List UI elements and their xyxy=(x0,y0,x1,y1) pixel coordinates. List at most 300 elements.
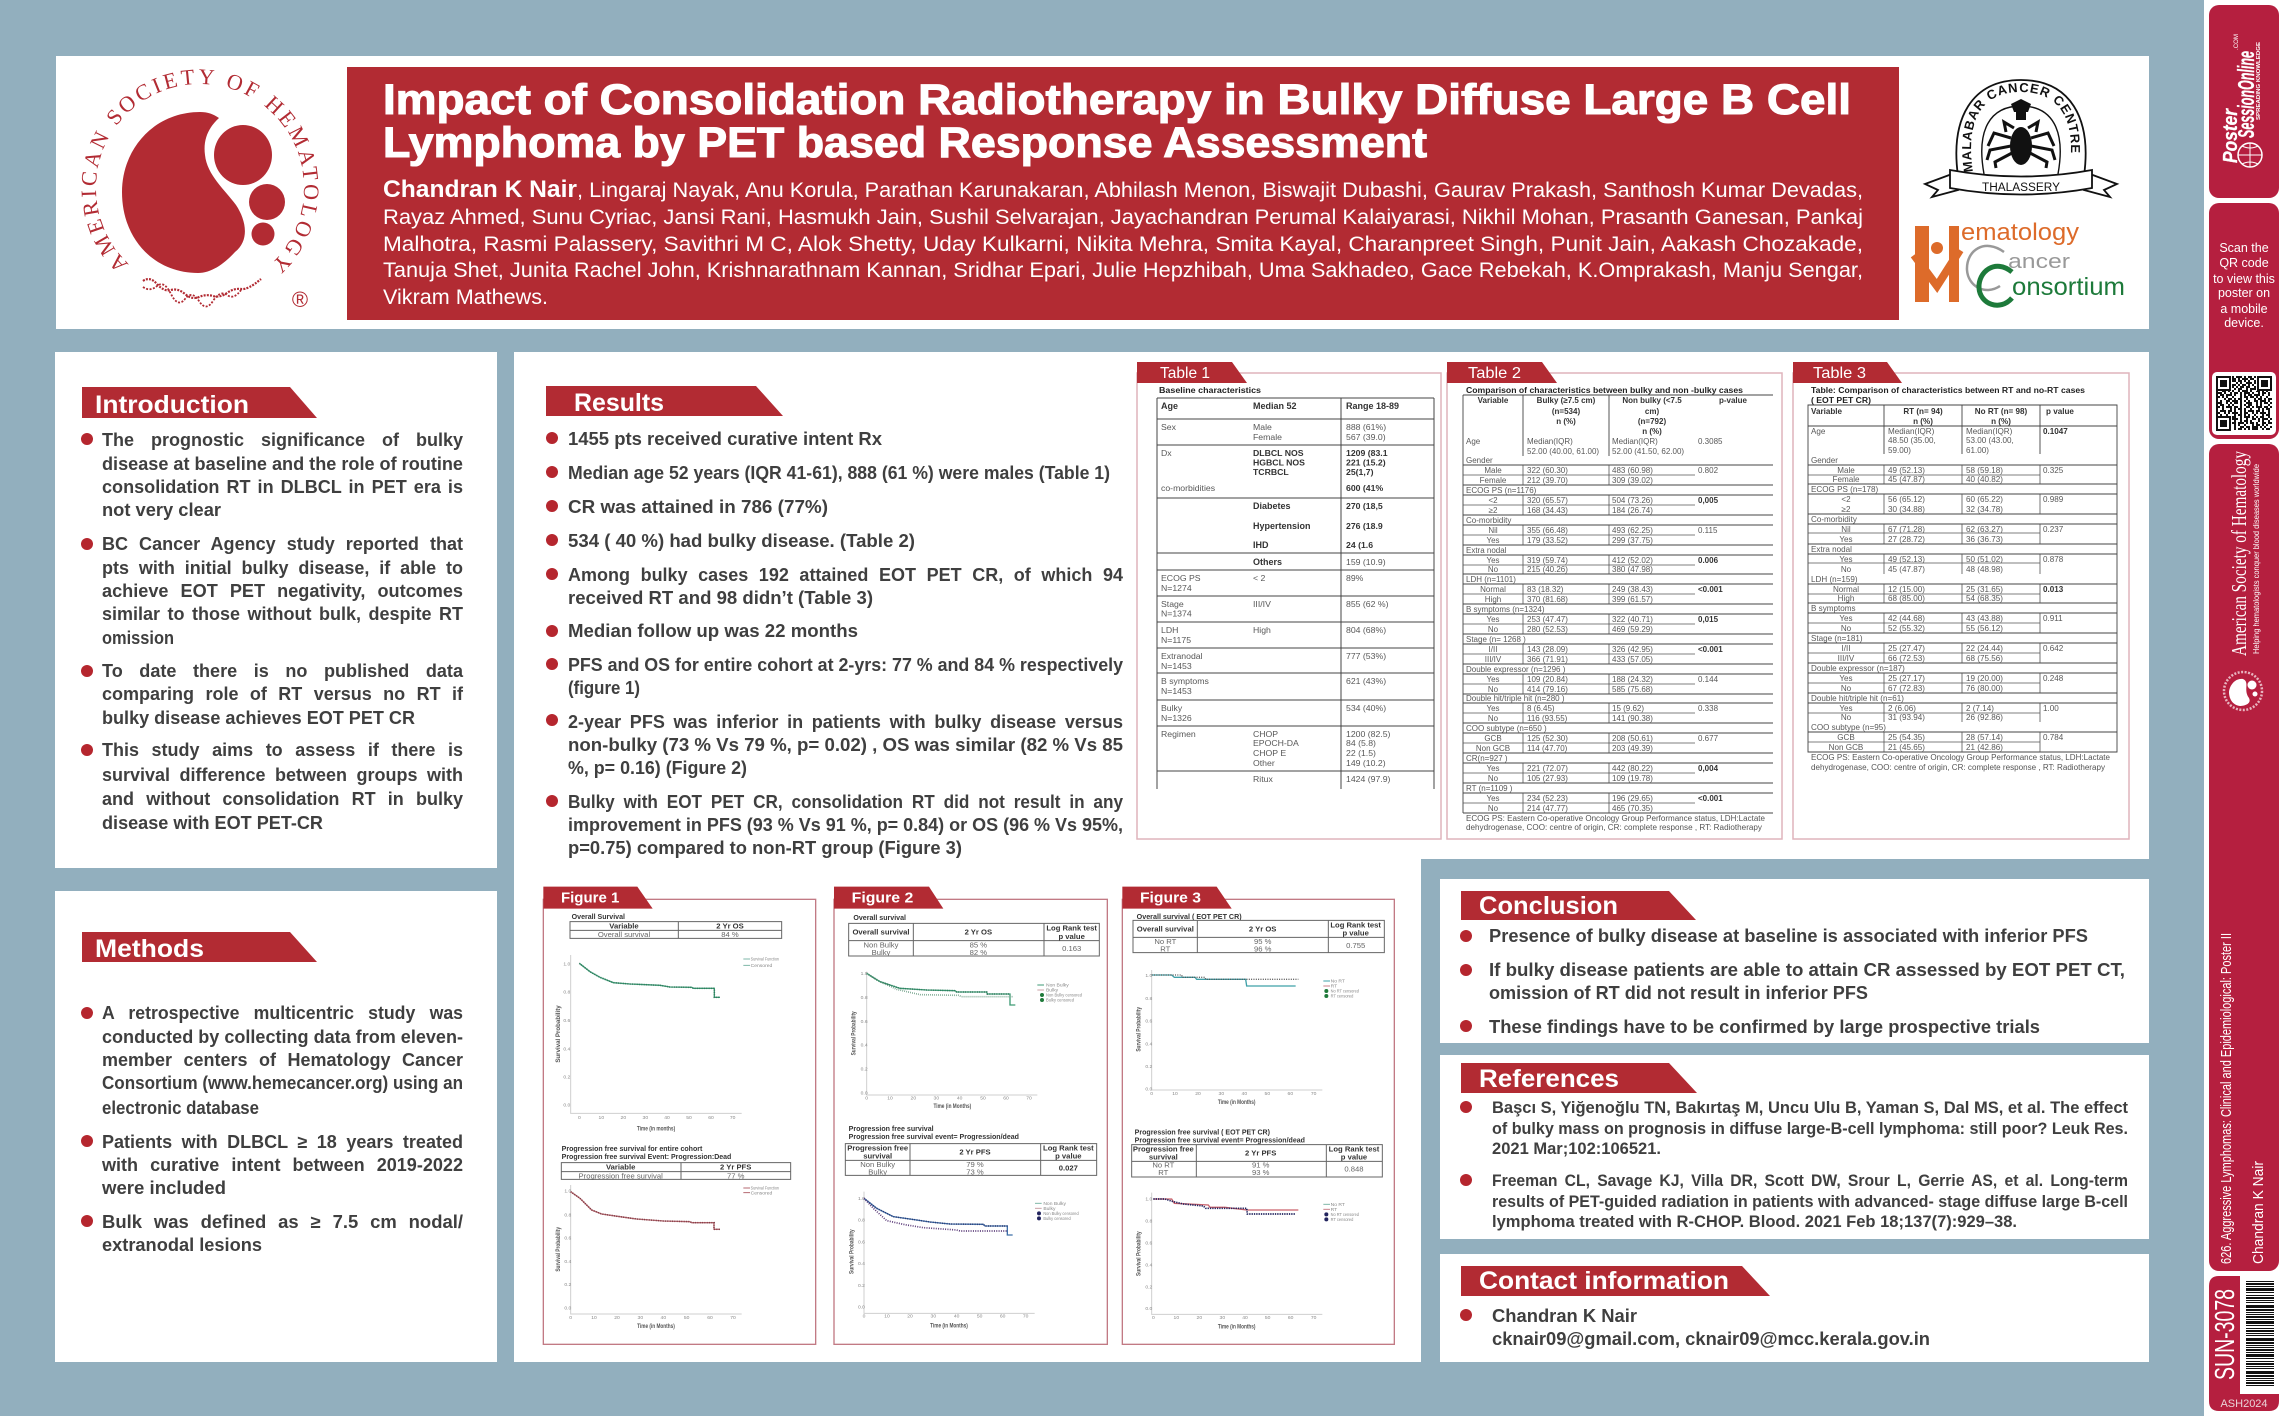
table: bulky vs non-bulky comparison: No xyxy=(1488,565,1499,574)
chart: progression free survival EOT PET CR: 30 xyxy=(1220,1315,1225,1321)
table: baseline characteristics: 221 (15.2) xyxy=(1346,458,1386,468)
sidebar: poster session online: Poster xyxy=(2220,108,2242,163)
chart: overall survival by bulk: 20 xyxy=(911,1095,916,1101)
table: RT vs no-RT comparison: 12 (15.00) xyxy=(1888,585,1925,594)
tab: figure 1 xyxy=(543,887,653,909)
table: baseline characteristics: 1200 (82.5) xyxy=(1346,729,1391,739)
progression free survival table by bulk: p value xyxy=(1055,1151,1082,1160)
chart: overall survival curve: 40 xyxy=(664,1115,670,1121)
table: bulky vs non-bulky comparison: 412 (52.02) xyxy=(1612,556,1653,565)
reference list: lymphoma treated with R-CHOP. Blood. 2021 Feb 18;137(7):929–38. xyxy=(1492,1213,2017,1231)
overall survival table EOT PET CR: No RT xyxy=(1154,937,1177,946)
table: bulky vs non-bulky comparison: cm) xyxy=(1645,407,1659,416)
table: baseline characteristics: High xyxy=(1253,625,1271,635)
table: baseline characteristics: TCRBCL xyxy=(1253,467,1289,477)
table: bulky vs non-bulky comparison: 0.338 xyxy=(1698,704,1719,713)
table: RT vs no-RT comparison: High xyxy=(1838,594,1854,603)
chart: progression free survival by bulk: 0.4 xyxy=(858,1261,865,1267)
chart: progression free survival by bulk: 0.2 xyxy=(858,1283,865,1289)
progression free survival table EOT PET CR: No RT xyxy=(1152,1161,1175,1170)
table: baseline characteristics: 270 (18,5 xyxy=(1346,501,1383,511)
table title: baseline characteristics: Baseline characteristics xyxy=(1159,386,1262,395)
table: RT vs no-RT comparison: 67 (72.83) xyxy=(1888,684,1925,693)
panel: table 1 xyxy=(1137,362,1441,839)
table: bulky vs non-bulky comparison: 0.677 xyxy=(1698,734,1719,743)
reference list: of bulky mass on prognosis in diffuse large-B-cell lymphoma: still poor? Leuk Res. xyxy=(1492,1120,2128,1138)
temple crest xyxy=(2011,99,2031,120)
overall survival table EOT PET CR: 2 Yr OS xyxy=(1249,925,1276,934)
progression free survival table by bulk: 2 Yr PFS xyxy=(959,1147,991,1156)
table: baseline characteristics: 276 (18.9 xyxy=(1346,521,1383,531)
chart: overall survival EOT PET CR: 70 xyxy=(1311,1091,1317,1097)
table: RT vs no-RT comparison: 0.989 xyxy=(2043,495,2064,504)
table: bulky vs non-bulky comparison: Female xyxy=(1480,476,1507,485)
icon: barcode xyxy=(2246,1281,2274,1387)
table: bulky vs non-bulky comparison: 83 (18.32) xyxy=(1527,585,1564,594)
table: RT vs no-RT comparison: 19 (20.00) xyxy=(1966,674,2003,683)
table: baseline characteristics: Median 52 xyxy=(1253,401,1297,411)
chart: progression free survival EOT PET CR: 40 xyxy=(1242,1315,1248,1321)
logo: Hematology Cancer Consortium: onsortium xyxy=(2012,273,2125,301)
table: bulky vs non-bulky comparison: 105 (27.93) xyxy=(1527,774,1568,783)
sidebar: poster number and barcode xyxy=(2209,1276,2279,1411)
chart: progression free survival by bulk: 30 xyxy=(931,1314,936,1320)
table: RT vs no-RT comparison: 25 (27.17) xyxy=(1888,674,1925,683)
chart: overall survival EOT PET CR: Time (in Months) xyxy=(1218,1099,1255,1106)
overall survival table by bulk: Overall survival xyxy=(853,913,906,922)
table: RT vs no-RT comparison: 55 (56.12) xyxy=(1966,624,2003,633)
panel: methods xyxy=(55,891,497,1362)
chart: progression free survival curve: Survival Function xyxy=(751,1186,779,1192)
table: bulky vs non-bulky comparison: Yes xyxy=(1486,536,1500,545)
table: bulky vs non-bulky comparison: Double expressor (n=1296 ) xyxy=(1466,665,1566,674)
table: bulky vs non-bulky comparison: 114 (47.70) xyxy=(1527,744,1568,753)
logo: Malabar Cancer Centre: MALABAR CANCER CENTRE xyxy=(1962,83,2080,172)
table: baseline characteristics: Hypertension xyxy=(1253,521,1311,531)
table: baseline characteristics: Other xyxy=(1253,758,1275,768)
header panel xyxy=(56,56,2149,329)
table: bulky vs non-bulky comparison: RT (n=1109 ) xyxy=(1466,784,1513,793)
table: baseline characteristics: 84 (5.8) xyxy=(1346,738,1376,748)
chart: progression free survival curve: 0.2 xyxy=(564,1282,571,1288)
chart: overall survival by bulk: Survival Probability xyxy=(851,1011,858,1055)
bullets: results: CR was attained in 786 (77%) xyxy=(568,497,828,517)
table: bulky vs non-bulky comparison: 370 (81.68) xyxy=(1527,595,1568,604)
bullets: conclusion: Presence of bulky disease at baseline is associated with inferior PFS xyxy=(1489,926,2088,946)
chart: progression free survival by bulk: 10 xyxy=(884,1314,890,1320)
table: RT vs no-RT comparison: 45 (47.87) xyxy=(1888,475,1925,484)
table: RT vs no-RT comparison: 54 (68.35) xyxy=(1966,594,2003,603)
bullets: methods: Patients with DLBCL ≥ 18 years treated xyxy=(102,1132,463,1152)
table: bulky vs non-bulky comparison: Median(IQR) xyxy=(1612,437,1658,446)
table: RT vs no-RT comparison: 40 (40.82) xyxy=(1966,475,2003,484)
chart: overall survival EOT PET CR: No RT censored xyxy=(1331,989,1359,995)
contact details: Chandran K Nair xyxy=(1492,1306,1637,1326)
bullets: results: Bulky with EOT PET CR, consolidation RT did not result in any xyxy=(568,792,1123,812)
table: bulky vs non-bulky comparison: 52.00 (40.00, 61.00) xyxy=(1527,447,1599,456)
table: RT vs no-RT comparison: Non GCB xyxy=(1829,743,1863,752)
bullets: methods: electronic database xyxy=(102,1098,259,1118)
chart: overall survival EOT PET CR: RT xyxy=(1331,984,1337,990)
table: RT vs no-RT comparison: 67 (71.28) xyxy=(1888,525,1925,534)
table: bulky vs non-bulky comparison: 188 (24.32) xyxy=(1612,675,1653,684)
chart: progression free survival EOT PET CR: 0.0 xyxy=(1145,1306,1152,1312)
chart: progression free survival EOT PET CR: 70 xyxy=(1311,1315,1317,1321)
table: bulky vs non-bulky comparison: 0.115 xyxy=(1698,526,1718,535)
heading: methods: Methods xyxy=(95,935,204,963)
table: baseline characteristics: DLBCL NOS xyxy=(1253,448,1304,458)
progression free survival table EOT PET CR: Progression free xyxy=(1133,1144,1194,1153)
table: baseline characteristics: 1424 (97.9) xyxy=(1346,774,1391,784)
chart: progression free survival by bulk: Bulky censored xyxy=(1043,1216,1071,1222)
tab: table 2 xyxy=(1447,362,1557,383)
table: RT vs no-RT comparison: 36 (36.73) xyxy=(1966,535,2003,544)
table: RT vs no-RT comparison: 42 (44.68) xyxy=(1888,614,1925,623)
panel: references xyxy=(1440,1055,2149,1239)
table: bulky vs non-bulky comparison: Variable xyxy=(1478,396,1509,405)
table: bulky vs non-bulky comparison: n (%) xyxy=(1556,417,1576,426)
overall survival table by bulk: Log Rank test xyxy=(1046,924,1097,933)
table: bulky vs non-bulky comparison: Median(IQR) xyxy=(1527,437,1573,446)
table: bulky vs non-bulky comparison: 212 (39.70) xyxy=(1527,476,1568,485)
chart: progression free survival EOT PET CR: Time (in Months) xyxy=(1218,1323,1255,1330)
table: RT vs no-RT comparison: 56 (65.12) xyxy=(1888,495,1925,504)
overall survival table: Overall Survival xyxy=(572,912,625,921)
chart: progression free survival by bulk: 1.0 xyxy=(858,1196,865,1202)
panel: results xyxy=(514,352,2149,1362)
table: baseline characteristics: Others xyxy=(1253,557,1282,567)
chart: progression free survival by bulk xyxy=(848,1192,1079,1329)
chart: overall survival curve: 30 xyxy=(643,1115,648,1121)
table: bulky vs non-bulky comparison: 320 (65.57) xyxy=(1527,496,1568,505)
heading: introduction xyxy=(82,387,317,419)
chart: overall survival EOT PET CR: 0.2 xyxy=(1145,1064,1152,1070)
table: RT vs no-RT comparison: GCB xyxy=(1837,733,1855,742)
table: bulky vs non-bulky comparison: (n=792) xyxy=(1638,417,1666,426)
table: bulky vs non-bulky comparison: 465 (70.35) xyxy=(1612,804,1653,813)
chart: overall survival EOT PET CR: 1.0 xyxy=(1145,973,1152,979)
table: RT vs no-RT comparison: No xyxy=(1841,565,1852,574)
bullets: conclusion: These findings have to be confirmed by large prospective trials xyxy=(1489,1017,2040,1037)
progression free survival table: 2 Yr PFS xyxy=(720,1163,751,1172)
chart: overall survival curve: 1.0 xyxy=(563,962,570,968)
table: bulky vs non-bulky comparison: 0.144 xyxy=(1698,675,1719,684)
progression free survival table by bulk: 0.027 xyxy=(1059,1164,1078,1173)
table: RT vs no-RT comparison: COO subtype (n=95) xyxy=(1811,723,1886,732)
banner: Thalassery: THALASSERY xyxy=(1982,182,2060,194)
table: RT vs no-RT comparison: Normal xyxy=(1833,585,1859,594)
chart: overall survival by bulk: 10 xyxy=(887,1095,893,1101)
bullets: results: PFS and OS for entire cohort at 2-yrs: 77 % and 84 % respectively xyxy=(568,655,1123,675)
table: RT vs no-RT comparison: No xyxy=(1841,684,1852,693)
chart: overall survival curve: 20 xyxy=(621,1115,626,1121)
table: RT vs no-RT comparison: 61.00) xyxy=(1966,446,1989,455)
table: baseline characteristics: 159 (10.9) xyxy=(1346,557,1386,567)
banner: Thalassery xyxy=(1925,170,2117,197)
bullets: results: 1455 pts received curative intent Rx xyxy=(568,429,882,449)
table: RT vs no-RT comparison: 0.784 xyxy=(2043,733,2064,742)
overall survival table EOT PET CR: 95 % xyxy=(1254,937,1272,946)
bullets: methods: extranodal lesions xyxy=(102,1235,262,1255)
table: baseline characteristics: 777 (53%) xyxy=(1346,651,1386,661)
progression free survival table EOT PET CR: Progression free survival ( EOT PET CR) xyxy=(1135,1128,1270,1137)
table: RT vs no-RT comparison: Stage (n=181) xyxy=(1811,634,1863,643)
overall survival table by bulk: 82 % xyxy=(970,948,987,957)
table: bulky vs non-bulky comparison: 214 (47.77) xyxy=(1527,804,1568,813)
table: bulky vs non-bulky comparison: LDH (n=1101) xyxy=(1466,575,1516,584)
table: bulky vs non-bulky comparison: 215 (40.26) xyxy=(1527,565,1568,574)
sidebar: poster number and barcode: SUN-3078 xyxy=(2209,1289,2240,1380)
authors xyxy=(383,176,1863,309)
table: baseline characteristics: N=1175 xyxy=(1161,635,1191,645)
chart: overall survival EOT PET CR: Survival Probability xyxy=(1136,1007,1143,1052)
table: baseline characteristics: Age xyxy=(1161,401,1178,411)
chart: progression free survival curve: 20 xyxy=(614,1315,620,1321)
table: bulky vs non-bulky comparison: Bulky (≥7.5 cm) xyxy=(1537,396,1596,405)
bullets: introduction: not very clear xyxy=(102,500,221,520)
table: bulky vs non-bulky comparison: Non bulky (<7.5 xyxy=(1622,396,1682,405)
table: bulky vs non-bulky comparison: <0.001 xyxy=(1698,794,1723,803)
table: baseline characteristics: N=1453 xyxy=(1161,686,1192,696)
table: bulky vs non-bulky comparison: Nil xyxy=(1488,526,1498,535)
chart: overall survival EOT PET CR: 60 xyxy=(1288,1091,1293,1097)
bullets: introduction: achieve EOT PET negativity, outcomes xyxy=(102,581,463,601)
overall survival table: Variable xyxy=(609,921,639,930)
progression free survival table: Progression free survival for entire cohort xyxy=(562,1144,703,1153)
chart: progression free survival curve: 60 xyxy=(707,1315,713,1321)
chart: progression free survival EOT PET CR: No RT xyxy=(1331,1202,1345,1208)
table: bulky vs non-bulky comparison: Yes xyxy=(1486,615,1500,624)
progression free survival table by bulk: Log Rank test xyxy=(1043,1143,1094,1152)
panel: introduction xyxy=(55,352,497,868)
table: RT vs no-RT comparison: No xyxy=(1841,624,1852,633)
heading: results: Results xyxy=(574,389,664,417)
progression free survival table: Variable xyxy=(606,1163,635,1172)
table: RT vs no-RT comparison: 66 (72.53) xyxy=(1888,654,1925,663)
table: RT vs no-RT comparison: 25 (31.65) xyxy=(1966,585,2003,594)
bullets: introduction: This study aims to assess if there is xyxy=(102,740,463,760)
table: RT vs no-RT comparison: 0.911 xyxy=(2043,614,2063,623)
progression free survival table by bulk: 73 % xyxy=(966,1167,984,1176)
chart: overall survival curve: 60 xyxy=(708,1115,714,1121)
progression free survival table EOT PET CR: 91 % xyxy=(1252,1161,1270,1170)
table: RT vs no-RT comparison: Variable xyxy=(1811,407,1843,416)
table: baseline characteristics: Stage xyxy=(1161,599,1184,609)
chart: progression free survival by bulk: 50 xyxy=(977,1314,983,1320)
chart: progression free survival curve: 0.4 xyxy=(564,1259,571,1265)
table: RT vs no-RT comparison: 0.1047 xyxy=(2043,427,2068,436)
table: bulky vs non-bulky comparison: 168 (34.43) xyxy=(1527,506,1568,515)
table: bulky vs non-bulky comparison: <0.001 xyxy=(1698,645,1723,654)
bullets: introduction: disease with EOT PET-CR xyxy=(102,813,323,833)
overall survival table by bulk: p value xyxy=(1058,932,1085,941)
table 2 footnote xyxy=(1466,814,1766,832)
chart: progression free survival by bulk: 0.8 xyxy=(858,1218,865,1224)
progression free survival table: 77 % xyxy=(727,1171,745,1180)
table: baseline characteristics: 25(1,7) xyxy=(1346,467,1374,477)
panel: table 2 xyxy=(1447,362,1782,839)
table: bulky vs non-bulky comparison: 504 (73.26) xyxy=(1612,496,1653,505)
table: bulky vs non-bulky comparison: 15 (9.62) xyxy=(1612,704,1644,713)
table: RT vs no-RT comparison: <2 xyxy=(1841,495,1851,504)
progression free survival table EOT PET CR: 93 % xyxy=(1252,1168,1270,1177)
bullets: methods: were included xyxy=(101,1178,226,1198)
tab: figure 1: Figure 1 xyxy=(561,889,619,906)
chart: progression free survival EOT PET CR: 10 xyxy=(1174,1315,1179,1321)
table: bulky vs non-bulky comparison: COO subtype (n=650 ) xyxy=(1466,724,1547,733)
table: bulky vs non-bulky comparison: Double hit/triple hit (n=280 ) xyxy=(1466,694,1565,703)
table: bulky vs non-bulky comparison: p-value xyxy=(1719,396,1748,405)
overall survival table by bulk: 0.163 xyxy=(1062,944,1081,953)
reference list xyxy=(1460,1099,2128,1231)
chart: overall survival EOT PET CR: 50 xyxy=(1265,1091,1270,1097)
overall survival table: 2 Yr OS xyxy=(716,921,744,930)
table: RT vs no-RT comparison: Age xyxy=(1811,427,1826,436)
table: bulky vs non-bulky comparison: 366 (71.91) xyxy=(1527,655,1568,664)
table: baseline characteristics: co-morbidities xyxy=(1161,483,1216,493)
table: bulky vs non-bulky comparison: 179 (33.52) xyxy=(1527,536,1568,545)
overall survival table: Overall survival xyxy=(598,930,650,939)
progression free survival table EOT PET CR xyxy=(1132,1128,1382,1177)
poster title: Lymphoma by PET based Response Assessment xyxy=(383,119,1427,167)
progression free survival table xyxy=(561,1144,791,1180)
table: RT vs no-RT comparison: LDH (n=159) xyxy=(1811,575,1858,584)
sidebar: session details xyxy=(2209,444,2279,1271)
table: bulky vs non-bulky comparison: Yes xyxy=(1486,794,1500,803)
chart: progression free survival by bulk: Non Bulky censored xyxy=(1043,1211,1079,1217)
progression free survival table EOT PET CR: survival xyxy=(1149,1152,1178,1161)
poster title xyxy=(383,76,1851,167)
table: RT vs no-RT comparison: Yes xyxy=(1839,614,1853,623)
table: baseline characteristics: N=1326 xyxy=(1161,713,1192,723)
chart: progression free survival curve: 0.6 xyxy=(564,1236,571,1242)
bullets: introduction xyxy=(81,430,464,833)
progression free survival table by bulk: survival xyxy=(863,1151,892,1160)
progression free survival table: Progression free survival Event: Progression:Dead xyxy=(562,1152,732,1161)
chart: overall survival EOT PET CR xyxy=(1136,970,1359,1106)
table: RT vs no-RT comparison: Female xyxy=(1832,475,1860,484)
chart: progression free survival curve: 1.0 xyxy=(564,1189,571,1195)
chart: overall survival by bulk: Non Bulky censored xyxy=(1046,993,1082,999)
progression free survival table by bulk xyxy=(845,1124,1097,1176)
table: RT vs no-RT comparison: 0.237 xyxy=(2043,525,2064,534)
chart: overall survival EOT PET CR: No RT xyxy=(1331,979,1345,985)
panel: figure 2 xyxy=(834,887,1107,1344)
table: baseline characteristics: LDH xyxy=(1161,625,1178,635)
table: RT vs no-RT comparison: 25 (54.35) xyxy=(1888,733,1925,742)
chart: progression free survival curve: 0.8 xyxy=(564,1212,571,1218)
chart: overall survival curve: Time (in months) xyxy=(637,1126,675,1133)
table: baseline characteristics: Dx xyxy=(1161,448,1172,458)
table: RT vs no-RT comparison: n (%) xyxy=(1991,417,2011,426)
table: bulky vs non-bulky comparison: 299 (37.75) xyxy=(1612,536,1653,545)
table: baseline characteristics: 567 (39.0) xyxy=(1346,432,1386,442)
table: RT vs no-RT comparison: 0.325 xyxy=(2043,466,2064,475)
chart: progression free survival curve: 40 xyxy=(661,1315,666,1321)
chart: overall survival EOT PET CR: 0.0 xyxy=(1145,1087,1152,1093)
overall survival table by bulk: Non Bulky xyxy=(864,940,899,949)
progression free survival table by bulk: Progression free survival event= Progression/dead xyxy=(849,1132,1019,1141)
table: bulky vs non-bulky comparison: 0,015 xyxy=(1698,615,1719,624)
table: baseline characteristics: 22 (1.5) xyxy=(1346,748,1376,758)
table: RT vs no-RT comparison: 49 (52.13) xyxy=(1888,466,1925,475)
table: bulky vs non-bulky comparison: 203 (49.39) xyxy=(1612,744,1653,753)
scan instruction: to view this xyxy=(2213,272,2275,286)
table: RT vs no-RT comparison: 21 (45.65) xyxy=(1888,743,1925,752)
table: bulky vs non-bulky comparison: Yes xyxy=(1486,704,1500,713)
chart: overall survival by bulk: 60 xyxy=(1003,1095,1009,1101)
table: bulky vs non-bulky comparison: 196 (29.65) xyxy=(1612,794,1653,803)
table: baseline characteristics: HGBCL NOS xyxy=(1253,458,1305,468)
table: bulky vs non-bulky comparison: 125 (52.30) xyxy=(1527,734,1568,743)
table: RT vs no-RT comparison: Median(IQR) xyxy=(1966,427,2013,436)
table: bulky vs non-bulky comparison: 141 (90.38) xyxy=(1612,714,1653,723)
bullets: results: non-bulky (73 % Vs 79 %, p= 0.02) , OS was similar (82 % Vs 85 xyxy=(568,735,1123,755)
bullets: results: Median age 52 years (IQR 41-61), 888 (61 %) were males (Table 1) xyxy=(568,463,1110,483)
table: RT vs no-RT comparison: Yes xyxy=(1839,555,1853,564)
table: baseline characteristics: Bulky xyxy=(1161,703,1183,713)
table: baseline characteristics: 621 (43%) xyxy=(1346,676,1386,686)
table: bulky vs non-bulky comparison: 442 (80.22) xyxy=(1612,764,1653,773)
overall survival table EOT PET CR: Overall survival ( EOT PET CR) xyxy=(1137,912,1242,921)
table: bulky vs non-bulky comparison: 280 (52.53) xyxy=(1527,625,1568,634)
table: bulky vs non-bulky comparison: Extra nodal xyxy=(1466,546,1507,555)
bullets: results: %, p= 0.16) (Figure 2) xyxy=(568,758,747,778)
table: bulky vs non-bulky comparison: I/II xyxy=(1489,645,1497,654)
table: bulky vs non-bulky comparison: 0.3085 xyxy=(1698,437,1723,446)
table: bulky vs non-bulky comparison: 0.802 xyxy=(1698,466,1719,475)
table: RT vs no-RT comparison: Yes xyxy=(1839,704,1853,713)
table: bulky vs non-bulky comparison: <0.001 xyxy=(1698,585,1723,594)
table: baseline characteristics: EPOCH-DA xyxy=(1253,738,1299,748)
table: RT vs no-RT comparison: Male xyxy=(1837,466,1855,475)
overall survival table by bulk: 85 % xyxy=(970,940,987,949)
overall survival table by bulk: 2 Yr OS xyxy=(965,928,992,937)
chart: progression free survival by bulk: Bulky xyxy=(1043,1206,1056,1212)
chart: progression free survival by bulk: 70 xyxy=(1023,1314,1029,1320)
table: bulky vs non-bulky comparison: ECOG PS (n=1176) xyxy=(1466,486,1537,495)
chart: overall survival curve: Censored xyxy=(751,963,773,969)
scan instruction xyxy=(2213,241,2275,330)
table: RT vs no-RT comparison: Extra nodal xyxy=(1811,545,1852,554)
overall survival table EOT PET CR: RT xyxy=(1160,945,1171,954)
authors: Chandran K Nair xyxy=(383,176,577,203)
table: bulky vs non-bulky comparison: 221 (72.07) xyxy=(1527,764,1568,773)
sidebar: session details: Helping hematologists conquer blood diseases worldwide xyxy=(2251,464,2261,654)
table: RT vs no-RT comparison: 21 (42.86) xyxy=(1966,743,2003,752)
progression free survival table EOT PET CR: Progression free survival event= Progression/dead xyxy=(1135,1136,1305,1145)
chart: overall survival curve: 70 xyxy=(730,1115,736,1121)
table: RT vs no-RT comparison: ECOG PS (n=178) xyxy=(1811,485,1879,494)
chart: overall survival EOT PET CR: 40 xyxy=(1242,1091,1247,1097)
table: RT vs no-RT comparison: Yes xyxy=(1839,535,1853,544)
table: bulky vs non-bulky comparison: 8 (6.45) xyxy=(1527,704,1555,713)
chart: overall survival by bulk: Non Bulky xyxy=(1046,983,1069,989)
panel: figure 3 xyxy=(1122,887,1394,1344)
progression free survival table EOT PET CR: RT xyxy=(1158,1168,1169,1177)
table: bulky vs non-bulky comparison xyxy=(1463,395,1773,813)
table: bulky vs non-bulky comparison: 319 (59.74) xyxy=(1527,556,1568,565)
chart: progression free survival EOT PET CR: 0.4 xyxy=(1145,1262,1152,1268)
table: bulky vs non-bulky comparison: Stage (n= 1268 ) xyxy=(1466,635,1526,644)
scan instruction: QR code xyxy=(2219,256,2269,270)
chart: progression free survival by bulk: 40 xyxy=(954,1314,960,1320)
table: bulky vs non-bulky comparison: 483 (60.98) xyxy=(1612,466,1653,475)
table: RT vs no-RT comparison: Double hit/triple hit (n=61) xyxy=(1811,694,1904,703)
title banner xyxy=(347,67,1899,320)
logo: Malabar Cancer Centre xyxy=(1922,79,2120,199)
bullets: introduction: comparing role of RT versus no RT if xyxy=(102,684,464,704)
